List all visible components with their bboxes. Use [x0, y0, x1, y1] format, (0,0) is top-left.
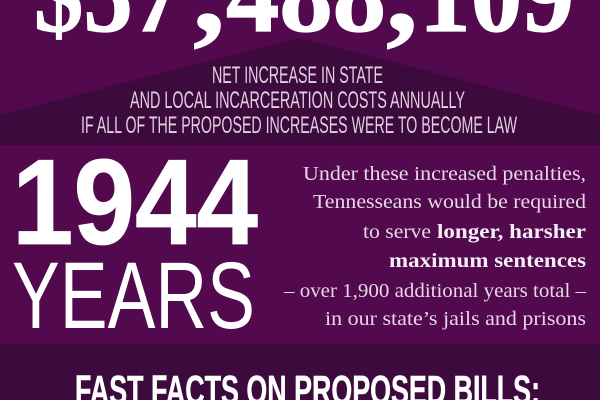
sentence explanation text block: [283, 163, 587, 330]
sentence explanation text block: – over 1,900 additional years total –: [283, 280, 587, 302]
big label: years: YEARS: [12, 243, 255, 349]
sentence explanation text block: in our state’s jails and prisons: [325, 308, 586, 330]
headline cost figure: [34, 0, 574, 57]
sentence explanation text block: Under these increased penalties,: [303, 163, 586, 185]
sentence explanation text block: maximum sentences: [389, 250, 586, 272]
cost caption text block: [81, 62, 517, 139]
cost caption text block: NET INCREASE IN STATE: [212, 62, 383, 89]
panel: dark roof shape behind cost caption: [0, 38, 600, 145]
sentence explanation text block: Tennesseans would be required: [313, 191, 586, 213]
panel: dark footer band: [0, 344, 600, 400]
big number: 1944: 1944: [12, 134, 258, 270]
sentence explanation text block: longer, harsher: [437, 221, 586, 243]
sentence explanation text block: to serve: [363, 221, 431, 243]
